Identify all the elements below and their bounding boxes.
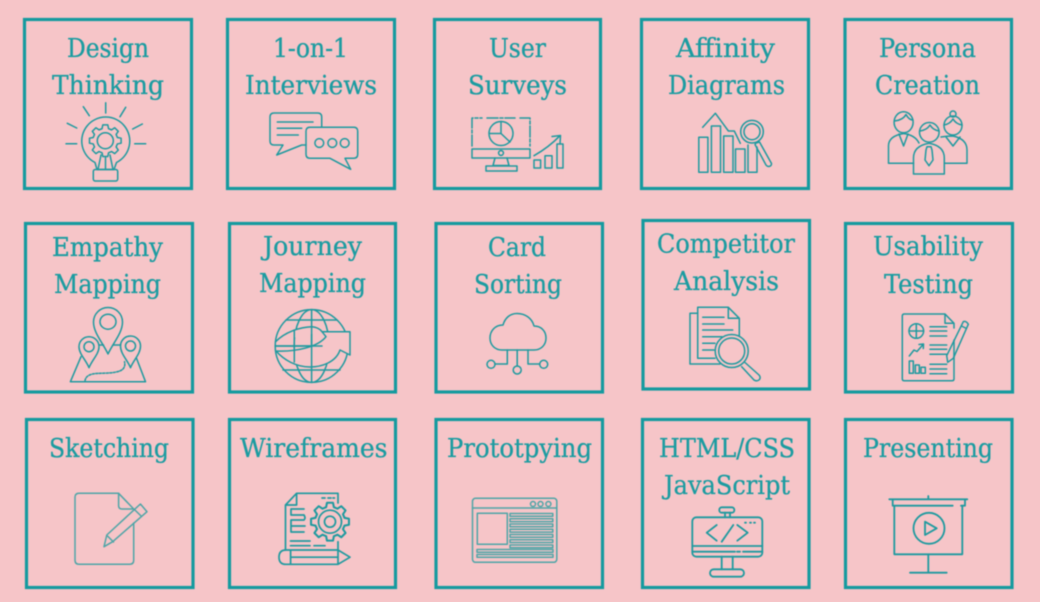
panel: Competitor Analysis [643,220,810,389]
frame [642,20,808,188]
heading: Usability [873,232,983,262]
heading: Sketching [49,434,169,464]
heading: Diagrams [668,71,785,101]
panel: Persona Creation [845,20,1012,188]
frame [230,420,396,588]
icon: three people [888,111,967,174]
panel: Empathy Mapping [26,224,192,392]
icon: projector screen with play button [889,496,967,573]
heading [52,34,164,101]
heading: Thinking [52,71,164,101]
heading: JavaScript [661,471,791,501]
icon: page with pencil [75,493,147,564]
heading [659,434,795,501]
panel: Wireframes [230,420,396,588]
heading: Testing [884,270,973,300]
heading: Sorting [474,270,562,300]
heading [875,34,980,101]
heading: Mapping [259,269,366,299]
panel: 1-on-1 Interviews [228,20,394,188]
heading: User [489,34,547,64]
heading: Surveys [468,71,567,101]
heading: Design [67,34,149,64]
frame [26,224,192,392]
panel: Usability Testing [846,224,1012,392]
heading: Card [488,233,546,263]
icon: globe with arrow [275,310,350,382]
icon: speech bubbles [270,113,358,169]
panel: Affinity Diagrams [642,20,808,188]
panel: User Surveys [434,20,600,188]
panel: Sketching [26,420,193,588]
icon: cloud network [487,314,548,374]
frame [228,20,394,188]
frame [26,420,193,588]
frame [846,224,1012,392]
icon: document with gear and pencil [279,493,350,564]
heading [474,233,562,300]
heading: Journey [260,232,362,262]
heading: HTML/CSS [659,434,795,464]
heading: Prototpying [447,434,592,464]
heading: Mapping [54,270,161,300]
frame [434,20,600,188]
frame [642,420,809,588]
frame [230,224,396,392]
panel: Card Sorting [436,224,602,392]
icon: code monitor [692,507,762,577]
heading [873,232,983,300]
heading: Wireframes [240,434,388,464]
heading [245,34,377,101]
heading [468,34,567,101]
heading: Empathy [52,233,163,263]
icon: browser window [472,498,557,562]
frame [643,220,810,389]
heading [668,34,785,101]
frame [846,420,1012,588]
heading: Persona [879,34,976,64]
panel: Journey Mapping [230,224,396,392]
icon: map pins [70,308,146,382]
heading: Competitor [657,230,796,260]
icon: monitor with chart [472,118,563,171]
frame [845,20,1012,188]
heading: Presenting [863,434,993,464]
heading: Affinity [675,34,775,64]
panel: HTML/CSS JavaScript [642,420,809,588]
heading: 1-on-1 [273,34,348,64]
frame [436,224,602,392]
heading [259,232,366,299]
heading [657,230,796,297]
panel: Prototyping [436,420,602,588]
panel: Presenting [846,420,1012,588]
icon: report with pencil [902,314,968,381]
heading: Creation [875,71,980,101]
icon: light bulb with gear [66,103,146,181]
panel: Design Thinking [24,20,192,188]
icon: documents with magnifier [690,307,760,381]
icon: bar chart with magnifier [699,113,772,172]
heading: Interviews [245,71,377,101]
frame [436,420,602,588]
frame [24,20,192,188]
heading: Analysis [673,267,779,297]
heading [52,233,163,300]
